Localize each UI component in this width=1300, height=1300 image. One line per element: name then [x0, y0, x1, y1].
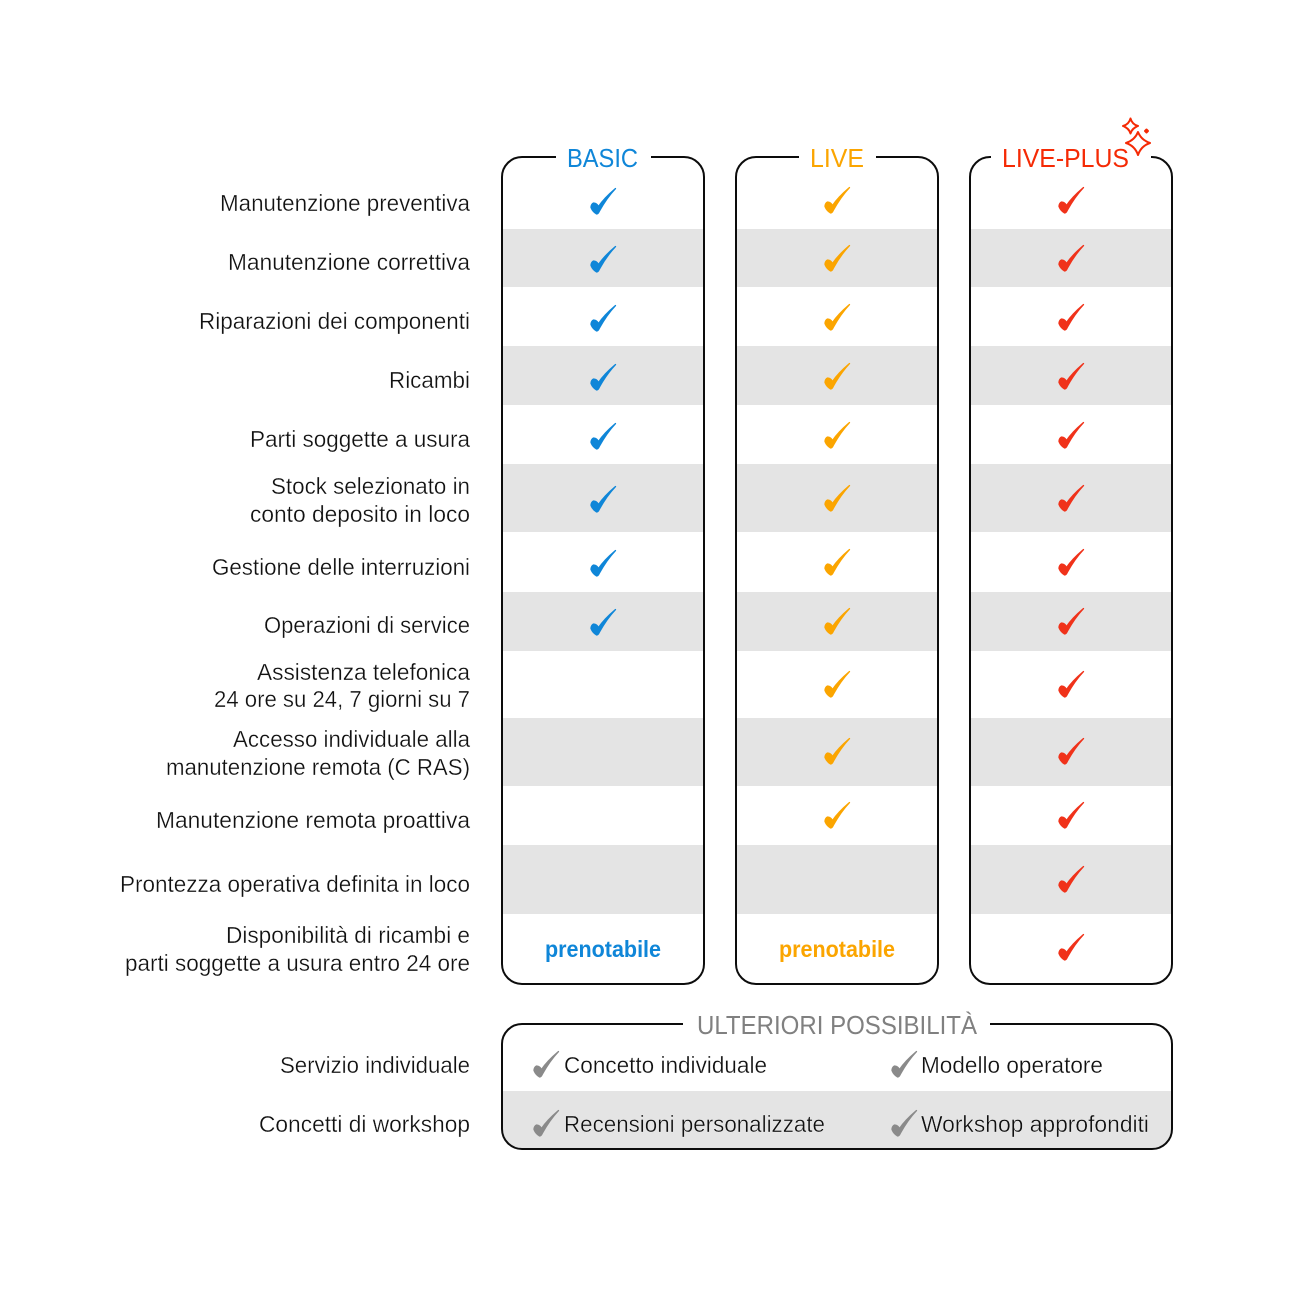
checks: BASIC [591, 188, 616, 635]
feature labels: conto deposito in loco [250, 501, 470, 527]
feature labels: Manutenzione preventiva [220, 190, 471, 216]
feature labels: Concetti di workshop [259, 1111, 470, 1137]
panel: LIVE [736, 145, 938, 984]
text: prenotabile BASIC: prenotabile [545, 936, 661, 962]
feature labels: Gestione delle interruzioni [212, 554, 470, 580]
options text: Modello operatore [921, 1052, 1103, 1078]
feature labels: parti soggette a usura entro 24 ore [125, 950, 470, 976]
feature labels: Operazioni di service [264, 612, 470, 638]
icon: sparkles [1123, 118, 1150, 155]
feature labels: Assistenza telefonica [257, 659, 471, 685]
feature labels: manutenzione remota (C RAS) [166, 754, 470, 780]
feature labels: Accesso individuale alla [233, 726, 471, 752]
feature labels: Parti soggette a usura [250, 426, 471, 452]
options text [564, 1052, 1149, 1137]
feature labels: Prontezza operativa definita in loco [120, 871, 470, 897]
options text: Workshop approfonditi [921, 1111, 1149, 1137]
heading: ulteriori possibilità: ULTERIORI POSSIBILITÀ [697, 1011, 977, 1040]
heading: LIVE-PLUS: LIVE-PLUS [1002, 145, 1129, 173]
heading: BASIC: BASIC [567, 145, 638, 173]
feature labels: Disponibilità di ricambi e [226, 922, 470, 948]
options text: Recensioni personalizzate [564, 1111, 825, 1137]
feature labels [120, 190, 471, 1137]
feature labels: Servizio individuale [280, 1052, 470, 1078]
heading: LIVE: LIVE [810, 145, 864, 173]
feature labels: Riparazioni dei componenti [199, 308, 470, 334]
feature labels: Manutenzione remota proattiva [156, 807, 471, 833]
feature labels: 24 ore su 24, 7 giorni su 7 [214, 686, 470, 712]
feature labels: Stock selezionato in [271, 473, 470, 499]
text: prenotabile LIVE: prenotabile [779, 936, 895, 962]
options text: Concetto individuale [564, 1052, 767, 1078]
panel: BASIC [502, 145, 704, 984]
checks: LIVE-PLUS [1059, 188, 1084, 960]
panel: LIVE-PLUS [970, 118, 1172, 984]
feature labels: Ricambi [389, 367, 470, 393]
feature labels: Manutenzione correttiva [228, 249, 471, 275]
checks: LIVE [825, 188, 850, 828]
panel: ulteriori possibilità [502, 1011, 1172, 1149]
checks: grey [534, 1052, 916, 1136]
